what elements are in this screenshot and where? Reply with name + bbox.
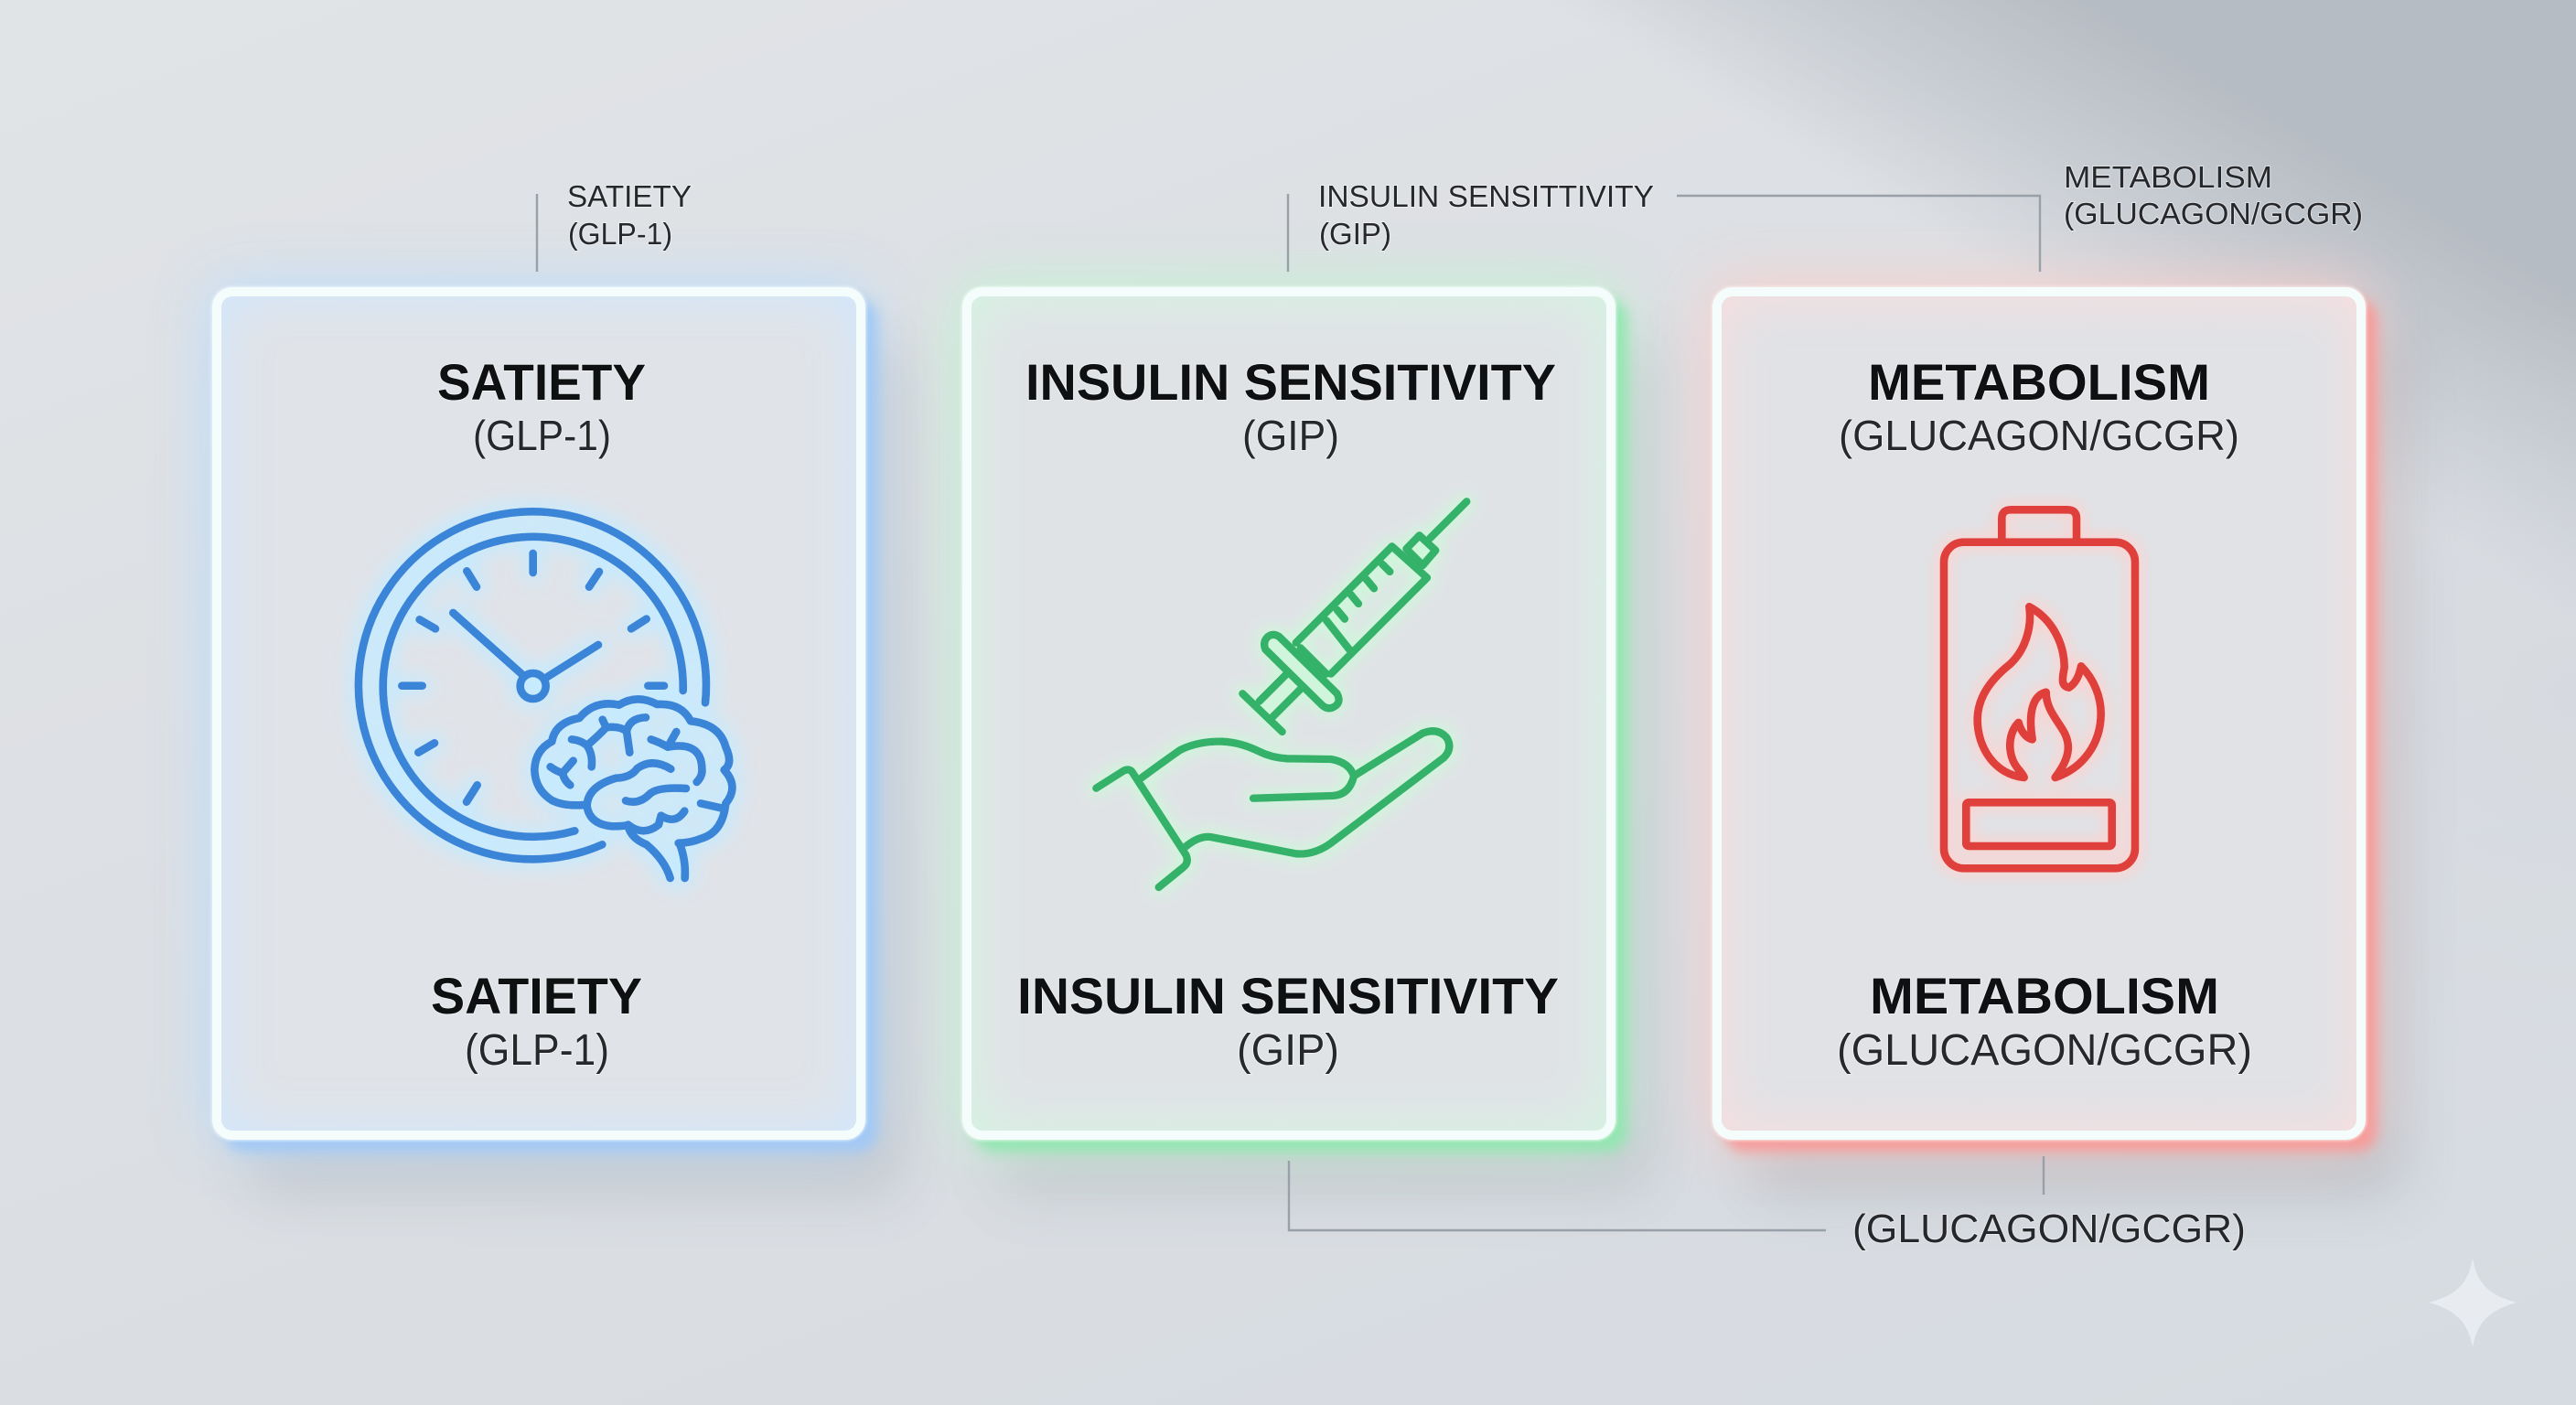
metabolism text: bottom caption: (GLUCAGON/GCGR) <box>1837 1026 2252 1075</box>
insulin text: bottom caption: (GIP) <box>1237 1026 1339 1075</box>
battery body <box>1944 509 2135 868</box>
satiety text: top heading <box>437 353 646 459</box>
insulin text: top heading: INSULIN SENSITIVITY <box>1025 353 1556 411</box>
metabolism text: top heading <box>1839 353 2239 459</box>
callout: insulin sensitivity label: INSULIN SENSITTIVITY <box>1318 179 1654 213</box>
callout: insulin sensitivity label <box>1288 179 1654 272</box>
callout: insulin sensitivity label: (GIP) <box>1319 217 1391 251</box>
flame <box>1978 606 2101 778</box>
callout: metabolism label with connector: METABOLISM <box>2064 160 2272 194</box>
brain <box>534 699 732 878</box>
callout: satiety label <box>537 179 692 272</box>
insulin text: bottom caption: INSULIN SENSITIVITY <box>1017 967 1559 1024</box>
icon: sparkle watermark <box>2429 1258 2517 1347</box>
satiety text: bottom caption: SATIETY <box>431 967 642 1024</box>
clock rings <box>359 511 706 859</box>
clock hands <box>453 613 598 699</box>
metabolism text: top heading: METABOLISM <box>1868 353 2210 411</box>
metabolism text: bottom caption: METABOLISM <box>1870 967 2219 1024</box>
syringe <box>1242 501 1466 732</box>
satiety text: bottom caption: (GLP-1) <box>465 1026 609 1075</box>
panel: metabolism <box>1712 287 2366 1140</box>
icon: syringe above open hand <box>1096 501 1466 887</box>
callout: glucagon bottom label with connectors: (GLUCAGON/GCGR) <box>1852 1207 2246 1251</box>
callout: metabolism label with connector: (GLUCAGON/GCGR) <box>2064 197 2363 231</box>
satiety text: top heading: (GLP-1) <box>473 412 611 459</box>
icon: clock with brain <box>359 511 732 878</box>
icon: battery with flame <box>1944 509 2135 868</box>
clock ticks <box>402 553 664 802</box>
insulin text: top heading: (GIP) <box>1242 412 1339 459</box>
metabolism text: top heading: (GLUCAGON/GCGR) <box>1839 412 2239 459</box>
callout: satiety label: SATIETY <box>567 179 692 213</box>
hand <box>1096 731 1449 887</box>
panel: insulin sensitivity <box>962 287 1615 1140</box>
callout: glucagon bottom label with connectors <box>1289 1156 2246 1251</box>
panel: satiety <box>212 287 865 1140</box>
insulin text: bottom caption <box>1017 967 1559 1075</box>
callout: metabolism label with connector <box>1677 160 2363 272</box>
satiety text: top heading: SATIETY <box>437 353 646 411</box>
callout: satiety label: (GLP-1) <box>568 217 672 251</box>
satiety text: bottom caption <box>431 967 642 1075</box>
insulin text: top heading <box>1025 353 1556 459</box>
metabolism text: bottom caption <box>1837 967 2252 1075</box>
